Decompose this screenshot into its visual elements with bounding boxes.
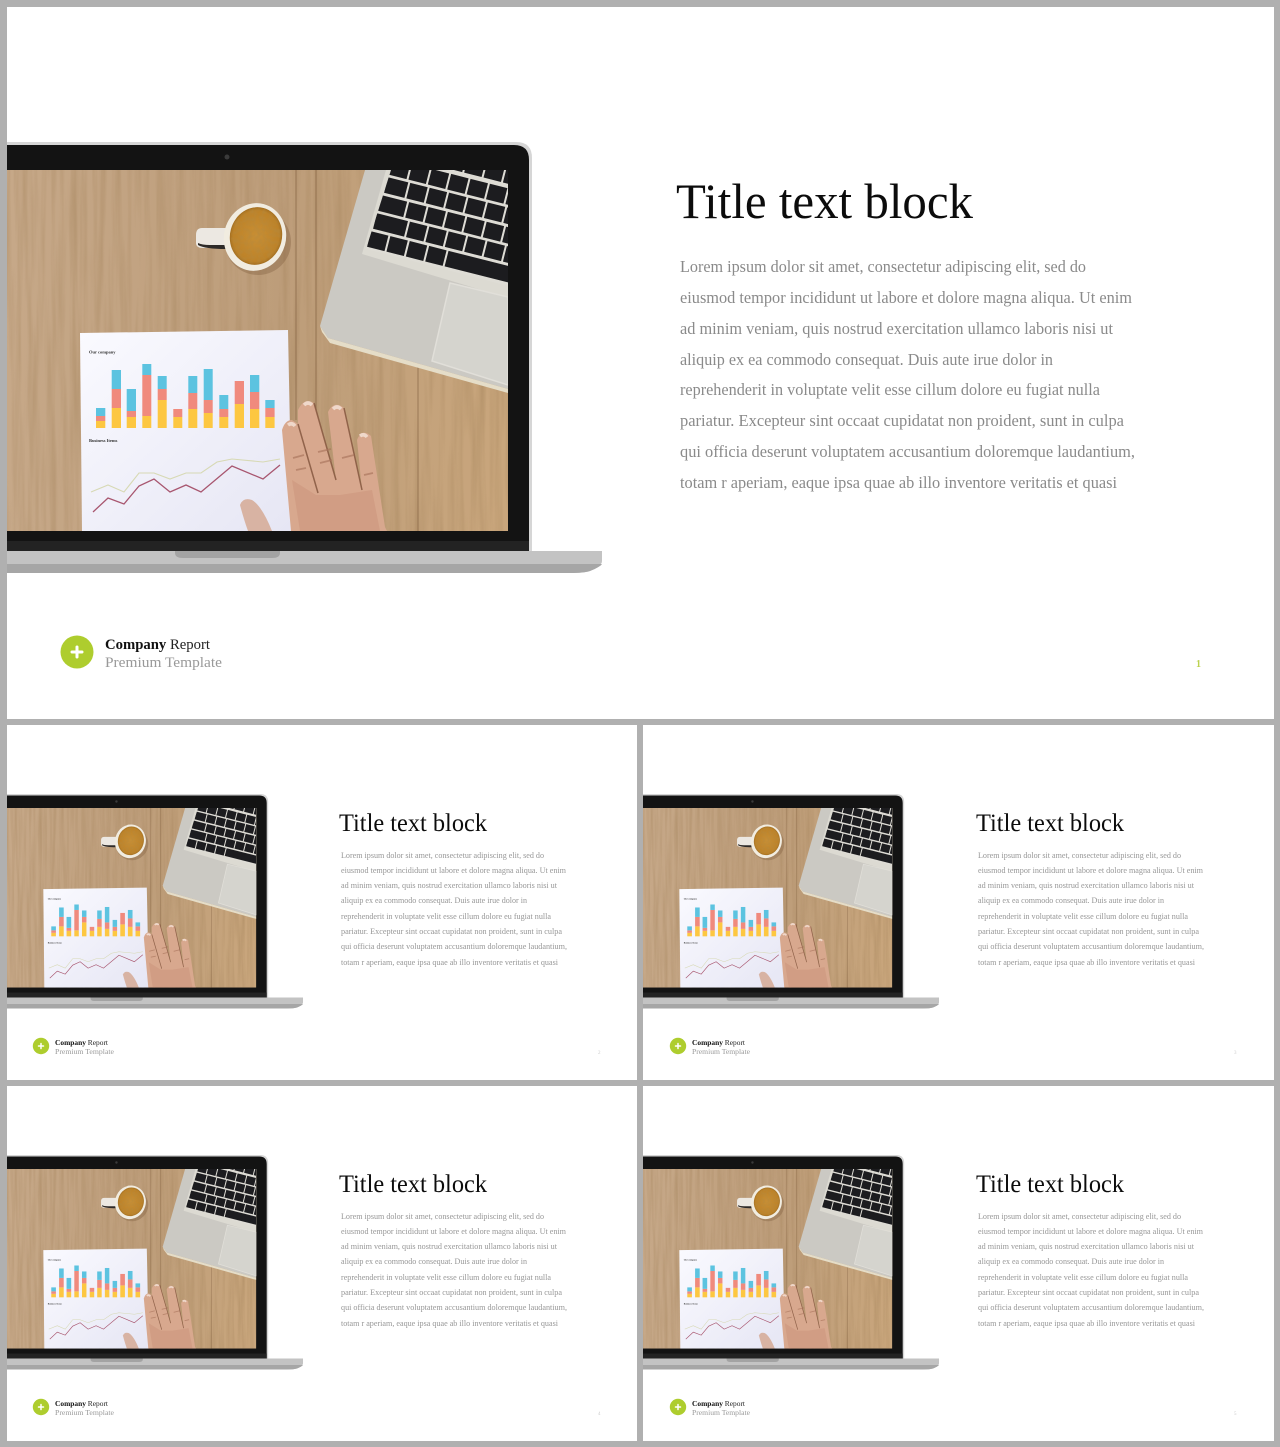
body text: aliquip ex ea commodo consequat. Duis aute irue dolor in — [341, 896, 527, 905]
body text: eiusmod tempor incididunt ut labore et dolore magna aliqua. Ut enim — [341, 866, 567, 875]
body text: Lorem ipsum dolor sit amet, consectetur adipiscing elit, sed do — [978, 851, 1181, 860]
body text: qui officia deserunt voluptatem accusantium doloremque laudantium, — [341, 942, 567, 951]
body text: aliquip ex ea commodo consequat. Duis aute irue dolor in — [341, 1257, 527, 1266]
footer subtitle: Premium Template — [692, 1408, 751, 1417]
body text: aliquip ex ea commodo consequat. Duis aute irue dolor in — [680, 350, 1053, 369]
footer company name: Company Report — [55, 1399, 109, 1408]
body text: ad minim veniam, quis nostrud exercitation ullamco laboris nisi ut — [978, 881, 1195, 890]
page number: 3 — [1234, 1051, 1237, 1056]
body text: ad minim veniam, quis nostrud exercitation ullamco laboris nisi ut — [341, 1242, 558, 1251]
footer logo icon — [670, 1399, 686, 1415]
panel: slide 3 — [643, 725, 1274, 1080]
body text: qui officia deserunt voluptatem accusantium doloremque laudantium, — [978, 942, 1204, 951]
page number: 4 — [598, 1412, 601, 1417]
body text: reprehenderit in voluptate velit esse cillum dolore eu fugiat nulla — [978, 1273, 1188, 1282]
body text: reprehenderit in voluptate velit esse cillum dolore eu fugiat nulla — [680, 380, 1101, 399]
footer logo icon — [33, 1399, 49, 1415]
body text: ad minim veniam, quis nostrud exercitation ullamco laboris nisi ut — [680, 319, 1113, 338]
panel: slide 5 — [643, 1086, 1274, 1441]
body text: totam r aperiam, eaque ipsa quae ab illo inventore veritatis et quasi — [978, 1319, 1196, 1328]
laptop image — [7, 142, 602, 573]
footer subtitle: Premium Template — [105, 655, 222, 671]
laptop image — [7, 1155, 303, 1369]
footer logo icon — [60, 636, 94, 668]
body text: totam r aperiam, eaque ipsa quae ab illo inventore veritatis et quasi — [341, 958, 559, 967]
body text: pariatur. Excepteur sint occaat cupidatat non proident, sunt in culpa — [978, 927, 1199, 936]
panel: large slide — [7, 7, 1274, 719]
footer company name: Company Report — [692, 1038, 746, 1047]
body text: pariatur. Excepteur sint occaat cupidatat non proident, sunt in culpa — [978, 1288, 1199, 1297]
laptop image — [643, 794, 939, 1008]
body text: reprehenderit in voluptate velit esse cillum dolore eu fugiat nulla — [341, 1273, 551, 1282]
body text — [978, 1212, 1204, 1328]
title: Title text block — [976, 1171, 1124, 1198]
body text — [341, 1212, 567, 1328]
footer subtitle: Premium Template — [55, 1047, 115, 1056]
page number: 2 — [598, 1051, 601, 1056]
title: Title text block — [676, 173, 973, 229]
page number: 1 — [1196, 659, 1201, 670]
body text — [341, 851, 567, 967]
footer logo icon — [670, 1038, 686, 1054]
body text: eiusmod tempor incididunt ut labore et dolore magna aliqua. Ut enim — [341, 1227, 567, 1236]
body text: qui officia deserunt voluptatem accusantium doloremque laudantium, — [680, 442, 1135, 461]
body text: reprehenderit in voluptate velit esse cillum dolore eu fugiat nulla — [341, 912, 551, 921]
body text: totam r aperiam, eaque ipsa quae ab illo inventore veritatis et quasi — [978, 958, 1196, 967]
panel: slide 2 — [7, 725, 637, 1080]
laptop image — [643, 1155, 939, 1369]
body text: pariatur. Excepteur sint occaat cupidatat non proident, sunt in culpa — [341, 1288, 562, 1297]
body text: Lorem ipsum dolor sit amet, consectetur adipiscing elit, sed do — [680, 257, 1086, 276]
body text: aliquip ex ea commodo consequat. Duis aute irue dolor in — [978, 1257, 1164, 1266]
footer company name: Company Report — [55, 1038, 109, 1047]
body text: totam r aperiam, eaque ipsa quae ab illo inventore veritatis et quasi — [680, 473, 1117, 492]
footer company name: Company Report — [105, 637, 211, 653]
body text: totam r aperiam, eaque ipsa quae ab illo inventore veritatis et quasi — [341, 1319, 559, 1328]
title: Title text block — [339, 810, 487, 837]
title: Title text block — [339, 1171, 487, 1198]
page number: 5 — [1234, 1412, 1237, 1417]
body text: aliquip ex ea commodo consequat. Duis aute irue dolor in — [978, 896, 1164, 905]
body text: eiusmod tempor incididunt ut labore et dolore magna aliqua. Ut enim — [978, 866, 1204, 875]
body text: Lorem ipsum dolor sit amet, consectetur adipiscing elit, sed do — [341, 1212, 544, 1221]
panel: slide 4 — [7, 1086, 637, 1441]
body text: eiusmod tempor incididunt ut labore et dolore magna aliqua. Ut enim — [978, 1227, 1204, 1236]
body text: Lorem ipsum dolor sit amet, consectetur adipiscing elit, sed do — [978, 1212, 1181, 1221]
body text: pariatur. Excepteur sint occaat cupidatat non proident, sunt in culpa — [680, 411, 1125, 430]
body text: ad minim veniam, quis nostrud exercitation ullamco laboris nisi ut — [978, 1242, 1195, 1251]
body text: ad minim veniam, quis nostrud exercitation ullamco laboris nisi ut — [341, 881, 558, 890]
footer company name: Company Report — [692, 1399, 746, 1408]
title: Title text block — [976, 810, 1124, 837]
body text: qui officia deserunt voluptatem accusantium doloremque laudantium, — [341, 1303, 567, 1312]
footer logo icon — [33, 1038, 49, 1054]
body text: Lorem ipsum dolor sit amet, consectetur adipiscing elit, sed do — [341, 851, 544, 860]
body text: eiusmod tempor incididunt ut labore et dolore magna aliqua. Ut enim — [680, 288, 1132, 307]
footer subtitle: Premium Template — [55, 1408, 115, 1417]
footer subtitle: Premium Template — [692, 1047, 751, 1056]
body text: pariatur. Excepteur sint occaat cupidatat non proident, sunt in culpa — [341, 927, 562, 936]
body text — [978, 851, 1204, 967]
body text — [680, 257, 1135, 492]
laptop image — [7, 794, 303, 1008]
body text: qui officia deserunt voluptatem accusantium doloremque laudantium, — [978, 1303, 1204, 1312]
body text: reprehenderit in voluptate velit esse cillum dolore eu fugiat nulla — [978, 912, 1188, 921]
